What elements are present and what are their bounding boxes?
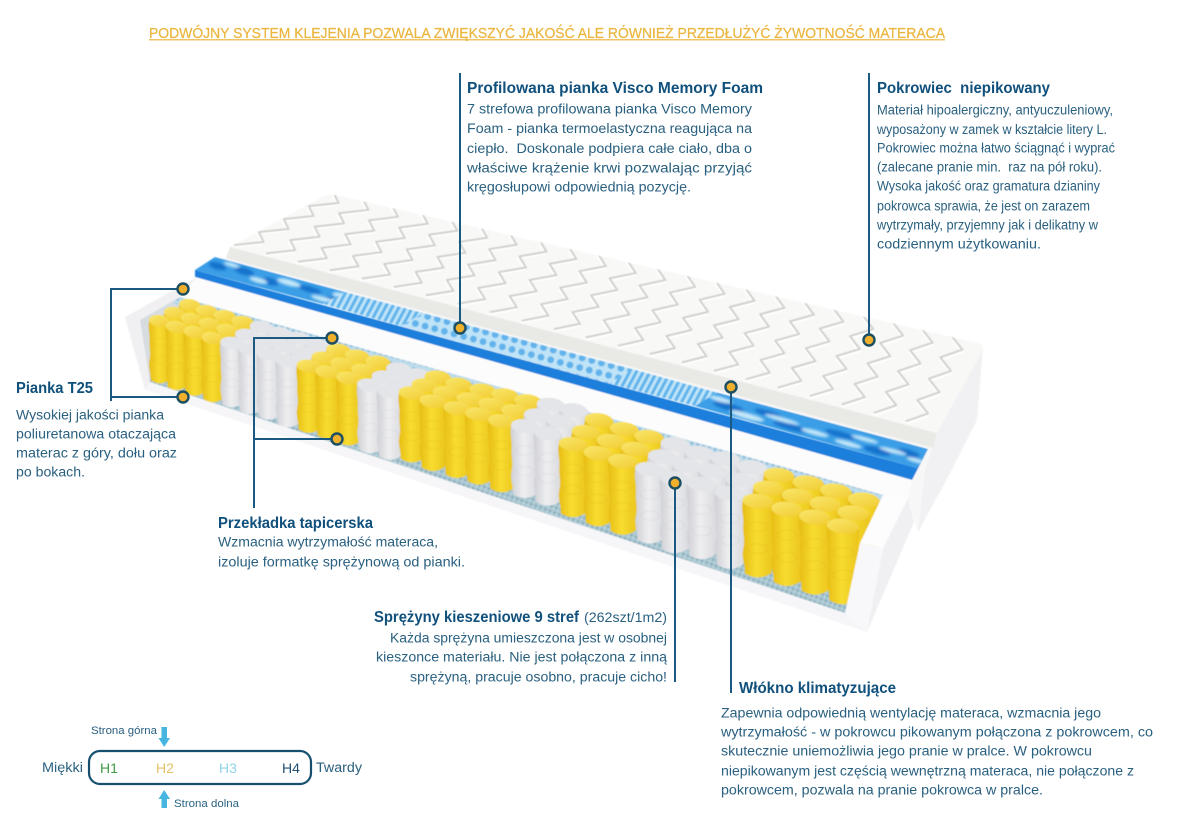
callout: Pokrowiec niepikowany: (zalecane pranie min. raz na pół roku).	[877, 160, 1102, 174]
icon: arrow up	[158, 790, 170, 808]
callout: Profilowana pianka Visco Memory Foam: Foam - pianka termoelastyczna reagująca na	[467, 121, 753, 136]
callout: Pokrowiec niepikowany: wyposażony w zamek w kształcie litery L.	[876, 122, 1107, 137]
mattress illustration	[125, 179, 983, 632]
callout: Pianka T25	[16, 284, 188, 480]
firmness legend: H2	[156, 760, 174, 776]
callout: Profilowana pianka Visco Memory Foam: kręgosłupowi odpowiednią pozycję.	[467, 180, 691, 194]
callout: Pokrowiec niepikowany: pokrowca sprawia, że jest on zarazem	[877, 198, 1090, 214]
callout: Profilowana pianka Visco Memory Foam: właściwe krążenie krwi pozwalając przyjąć	[466, 160, 752, 176]
callout: Pianka T25: Wysokiej jakości pianka	[16, 408, 165, 422]
blue visco foam layer	[195, 257, 928, 480]
callout: Pokrowiec niepikowany: wytrzymały, przyjemny jak i delikatny w	[876, 218, 1098, 232]
callout: Sprężyny kieszeniowe: Każda sprężyna umieszczona jest w osobnej	[390, 630, 667, 646]
callout: Sprężyny kieszeniowe	[374, 478, 680, 684]
white foam top rail	[180, 277, 912, 498]
callout: Pianka T25: materac z góry, dołu oraz	[16, 446, 177, 460]
firmness legend: Strona górna	[91, 725, 158, 737]
callout: Profilowana pianka Visco Memory Foam: 7 strefowa profilowana pianka Visco Memory	[467, 102, 752, 116]
callout: Pianka T25: po bokach.	[16, 464, 85, 480]
icon: arrow down	[158, 727, 170, 747]
callout: Włókno klimatyzujące: skutecznie uniemożliwia jego pranie w pralce. W pokrowcu	[721, 744, 1092, 758]
firmness legend: H3	[219, 760, 237, 776]
foam frame right end	[845, 495, 914, 632]
spring cavity	[140, 297, 883, 613]
callout: Przekładka tapicerska	[218, 332, 465, 570]
foam frame left end	[125, 277, 197, 390]
cover right side	[918, 348, 983, 532]
front foam strip	[145, 382, 867, 632]
callout: Pokrowiec niepikowany: Materiał hipoalergiczny, antyuczuleniowy,	[877, 102, 1113, 118]
callout: Profilowana pianka Visco Memory Foam: Profilowana pianka Visco Memory Foam	[467, 80, 763, 97]
callout: Przekładka tapicerska: Wzmacnia wytrzymałość materaca,	[218, 534, 438, 550]
callout: Pokrowiec niepikowany: Pokrowiec niepikowany	[877, 80, 1050, 97]
callout: Pokrowiec niepikowany: Wysoka jakość oraz gramatura dzianiny	[877, 178, 1100, 194]
callout: Sprężyny kieszeniowe: sprężyną, pracuje osobno, pracuje cicho!	[410, 670, 667, 684]
title: PODWÓJNY SYSTEM KLEJENIA POZWALA ZWIĘKSZYĆ JAKOŚĆ ALE RÓWNIEŻ PRZEDŁUŻYĆ ŻYWOTNOŚĆ MATERACA	[149, 24, 945, 42]
callout: Włókno klimatyzujące: Włókno klimatyzujące	[739, 680, 896, 697]
callout: Pokrowiec niepikowany: codziennym użytkowaniu.	[877, 236, 1041, 252]
callout: Pianka T25: Pianka T25	[16, 380, 93, 397]
callout: Włókno klimatyzujące: niepikowanym jest częścią wewnętrzną materaca, nie połączone z	[721, 764, 1134, 778]
firmness legend: H1	[100, 760, 118, 776]
callout: Włókno klimatyzujące: pokrowcem, pozwala na pranie pokrowca w pralce.	[721, 782, 1043, 798]
callout: Sprężyny kieszeniowe: kieszonce materiału. Nie jest połączona z inną	[376, 650, 668, 664]
firmness legend	[42, 725, 362, 810]
white foam band under quilted top	[215, 256, 937, 532]
callout: Pokrowiec niepikowany: Pokrowiec można łatwo ściągnąć i wyprać	[877, 140, 1115, 156]
callout: Profilowana pianka Visco Memory Foam	[454, 73, 763, 334]
callout: Profilowana pianka Visco Memory Foam: ciepło. Doskonale podpiera całe ciało, dba o	[467, 141, 752, 156]
callout: Przekładka tapicerska: izoluje formatkę sprężynową od pianki.	[218, 554, 465, 570]
callout: Pokrowiec niepikowany	[864, 73, 1115, 346]
callout: Włókno klimatyzujące	[720, 382, 1153, 798]
callout: Włókno klimatyzujące: wytrzymałość - w pokrowcu pikowanym połączona z pokrowcem, co	[720, 724, 1153, 740]
callout: Włókno klimatyzujące: Zapewnia odpowiednią wentylację materaca, wzmacnia jego	[721, 706, 1101, 720]
pocket springs	[148, 298, 881, 604]
firmness legend: Twardy	[316, 760, 362, 775]
quilted top cover	[234, 194, 964, 430]
firmness legend: H4	[282, 760, 300, 776]
quilted pad front edge	[226, 247, 937, 448]
callout: Pianka T25: poliuretanowa otaczająca	[16, 426, 177, 442]
back spacer strip	[172, 297, 883, 503]
bottom felt	[150, 372, 862, 613]
firmness legend: Miękki	[42, 760, 83, 775]
callout: Sprężyny kieszeniowe: Sprężyny kieszeniowe 9 stref	[374, 609, 580, 626]
callout: Przekładka tapicerska: Przekładka tapicerska	[218, 515, 373, 532]
callout: Sprężyny kieszeniowe: (262szt/1m2)	[584, 610, 667, 625]
firmness legend: Strona dolna	[174, 798, 240, 810]
